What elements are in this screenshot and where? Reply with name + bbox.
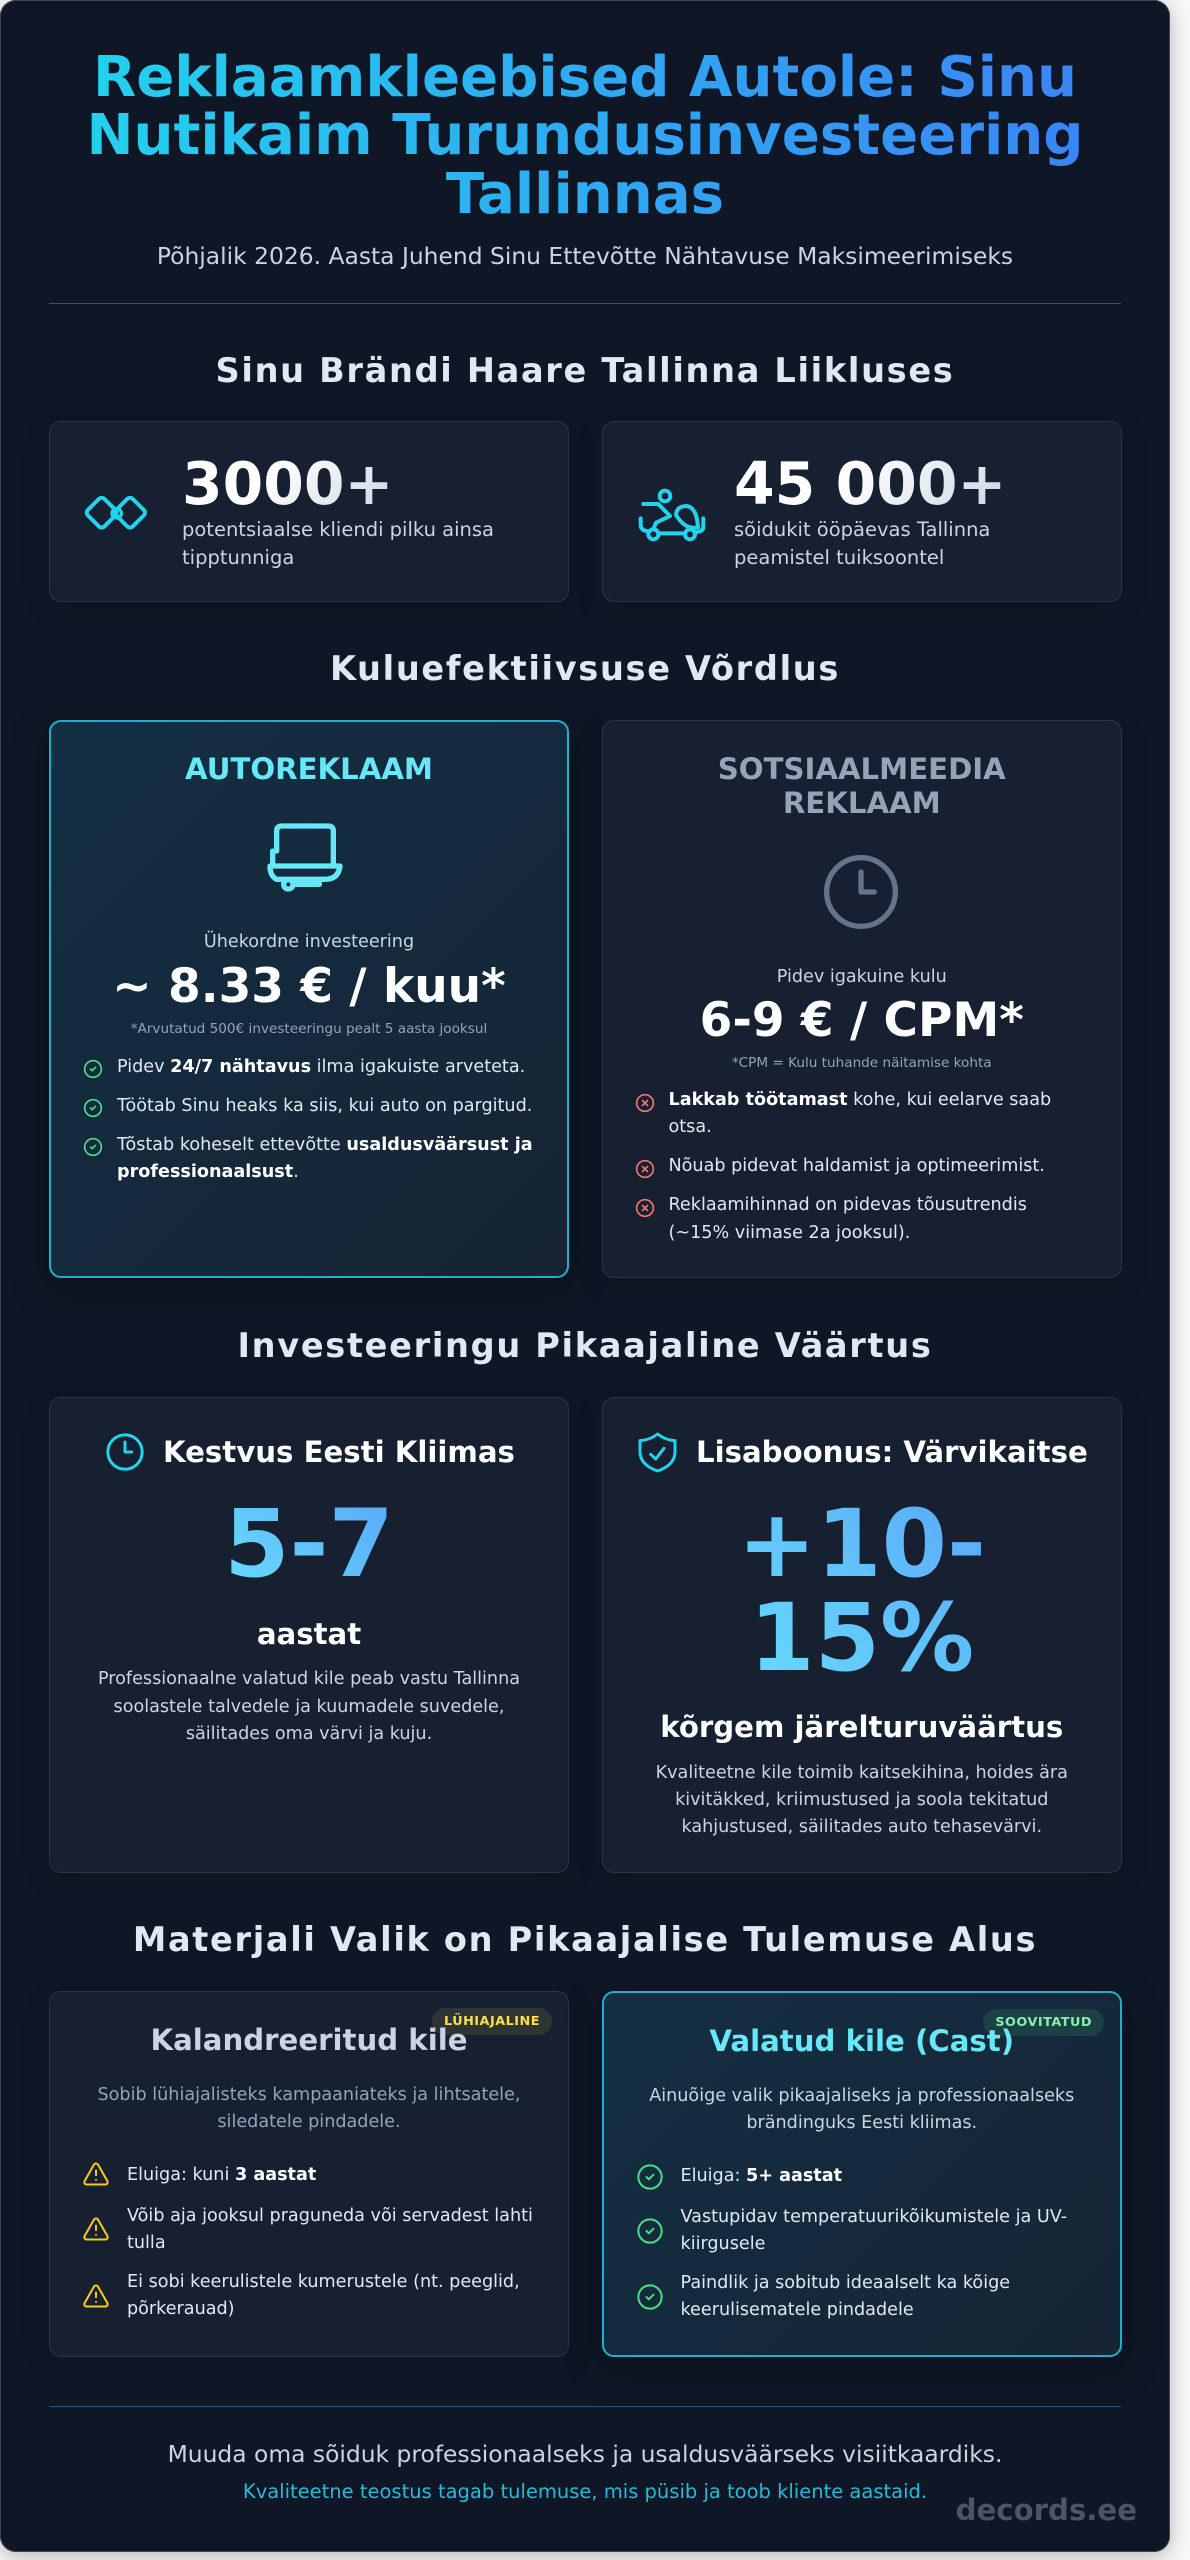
card heading: AUTOREKLAAM <box>185 752 433 786</box>
card heading <box>718 752 1006 820</box>
big number <box>737 1490 986 1693</box>
stat description: potentsiaalse kliendi pilku ainsa <box>182 518 494 541</box>
stat number: 3000+ <box>182 450 393 518</box>
list item: Pidev 24/7 nähtavus ilma igakuiste arveteta. <box>117 1056 525 1076</box>
cost label: Pidev igakuine kulu <box>777 967 947 987</box>
stat description: sõidukit ööpäevas Tallinna <box>734 518 990 541</box>
footer statement: Muuda oma sõiduk professionaalseks ja usaldusväärseks visiitkaardiks. <box>168 2440 1002 2468</box>
unit: kõrgem järelturuväärtus <box>660 1710 1063 1744</box>
big number: 15% <box>749 1584 974 1693</box>
card heading: Valatud kile (Cast) <box>709 2024 1014 2058</box>
panel: car advertising <box>49 720 569 1278</box>
list item <box>680 2207 1067 2254</box>
icon: clock <box>106 1433 144 1471</box>
panel: cast film <box>602 1991 1122 2357</box>
list item <box>127 2206 533 2253</box>
description: säilitades oma värvi ja kuju. <box>186 1724 432 1744</box>
stat description <box>734 518 990 569</box>
description <box>649 2086 1074 2133</box>
list item <box>636 1090 1051 1137</box>
card heading: REKLAAM <box>783 786 941 820</box>
list item: otsa. <box>668 1117 712 1137</box>
badge <box>983 2009 1104 2036</box>
title: Nutikaim Turundusinvesteering <box>86 103 1084 168</box>
title: Tallinnas <box>446 162 724 226</box>
badge: SOOVITATUD <box>995 2015 1092 2030</box>
list item <box>636 1195 1027 1243</box>
description: Ainuõige valik pikaajaliseks ja professionaalseks <box>649 2086 1074 2106</box>
stat number: 45 000+ <box>734 450 1006 518</box>
list item: Eluiga: 5+ aastat <box>680 2166 842 2186</box>
list item: professionaalsust. <box>117 1162 299 1182</box>
description: brändinguks Eesti kliimas. <box>746 2113 977 2133</box>
panel: stat 3000+ <box>49 421 569 602</box>
icon: warning <box>83 2162 109 2186</box>
list item: Nõuab pidevat haldamist ja optimeerimist. <box>668 1156 1045 1176</box>
footnote: *Arvutatud 500€ investeeringu pealt 5 aasta jooksul <box>131 1021 487 1037</box>
icon: check <box>637 2218 663 2244</box>
cost label: Ühekordne investeering <box>204 932 414 952</box>
list item: Ei sobi keerulistele kumerustele (nt. peeglid, <box>127 2272 520 2292</box>
description: Kvaliteetne kile toimib kaitsekihina, hoides ära <box>656 1763 1068 1783</box>
panel: durability <box>49 1397 569 1873</box>
title: Reklaamkleebised Autole: Sinu <box>93 44 1077 110</box>
list item: põrkerauad) <box>127 2299 235 2319</box>
description: kivitäkked, kriimustused ja soola tekitatud <box>675 1790 1048 1810</box>
heading: long-term value: Investeeringu Pikaajaline Väärtus <box>238 1326 932 1365</box>
list item: tulla <box>127 2233 166 2253</box>
icon: delivery scooter <box>638 488 706 542</box>
list item: Võib aja jooksul praguneda või servadest lahti <box>127 2206 533 2226</box>
unit: aastat <box>257 1616 361 1650</box>
heading: material choice: Materjali Valik on Pikaajalise Tulemuse Alus <box>133 1920 1037 1959</box>
description <box>656 1763 1068 1837</box>
badge <box>432 2008 552 2035</box>
icon: laptop-shaped car <box>267 823 343 892</box>
description: Sobib lühiajalisteks kampaaniateks ja lihtsatele, <box>98 2085 520 2105</box>
price: 6-9 € / CPM* <box>700 993 1024 1048</box>
list item: Tõstab koheselt ettevõtte usaldusväärsust ja <box>117 1134 533 1154</box>
list item <box>127 2272 520 2319</box>
panel: social media advertising <box>602 720 1122 1278</box>
icon: clock <box>824 855 898 929</box>
icon: check <box>637 2284 663 2310</box>
card heading: Kestvus Eesti Kliimas <box>163 1435 515 1469</box>
heading: cost comparison: Kuluefektiivsuse Võrdlus <box>330 649 840 688</box>
footer tagline: Kvaliteetne teostus tagab tulemuse, mis püsib ja toob kliente aastaid. <box>243 2480 927 2503</box>
icon: check <box>637 2164 663 2190</box>
stat description: tipptunniga <box>182 546 294 569</box>
description <box>98 2085 520 2132</box>
list item: Vastupidav temperatuurikõikumistele ja UV- <box>680 2207 1067 2227</box>
list item: keerulisematele pindadele <box>680 2300 914 2320</box>
subtitle: Põhjalik 2026. Aasta Juhend Sinu Ettevõtte Nähtavuse Maksimeerimiseks <box>157 242 1013 270</box>
list item <box>84 1134 533 1182</box>
description: soolastele talvedele ja kuumadele suvedele, <box>114 1697 504 1717</box>
icon: shield check <box>638 1432 676 1472</box>
stat description: peamistel tuiksoontel <box>734 546 944 569</box>
heading: brand reach: Sinu Brändi Haare Tallinna Liikluses <box>216 351 954 390</box>
list item: Eluiga: kuni 3 aastat <box>127 2165 316 2185</box>
big number: 5-7 <box>224 1490 394 1599</box>
card heading: Lisaboonus: Värvikaitse <box>696 1435 1088 1469</box>
description: kahjustused, säilitades auto tehasevärvi. <box>681 1817 1042 1837</box>
big number: +10- <box>737 1490 986 1599</box>
list item <box>680 2273 1010 2320</box>
badge: LÜHIAJALINE <box>444 2014 540 2029</box>
icon: linked diamonds <box>84 496 147 530</box>
description: siledatele pindadele. <box>217 2112 401 2132</box>
watermark: decords.ee <box>956 2493 1137 2527</box>
description <box>98 1669 520 1744</box>
price: ~ 8.33 € / kuu* <box>112 959 506 1014</box>
list item: (~15% viimase 2a jooksul). <box>668 1223 910 1243</box>
list item: kiirgusele <box>680 2234 765 2254</box>
card heading: SOTSIAALMEEDIA <box>718 752 1006 786</box>
description: Professionaalne valatud kile peab vastu Tallinna <box>98 1669 520 1689</box>
panel: calendered film <box>49 1991 569 2357</box>
footnote: *CPM = Kulu tuhande näitamise kohta <box>732 1055 992 1071</box>
panel: resale bonus <box>602 1397 1122 1873</box>
card heading: Kalandreeritud kile <box>150 2023 468 2057</box>
stat description <box>182 518 494 569</box>
list item: Töötab Sinu heaks ka siis, kui auto on pargitud. <box>117 1096 532 1116</box>
panel: stat 45 000+ <box>602 421 1122 602</box>
icon: warning <box>83 2218 109 2240</box>
icon: warning <box>83 2284 109 2308</box>
list item: Lakkab töötamast kohe, kui eelarve saab <box>668 1090 1051 1110</box>
title <box>49 48 1121 224</box>
list item: Paindlik ja sobitub ideaalselt ka kõige <box>680 2273 1010 2293</box>
list item: Reklaamihinnad on pidevas tõusutrendis <box>668 1195 1027 1215</box>
